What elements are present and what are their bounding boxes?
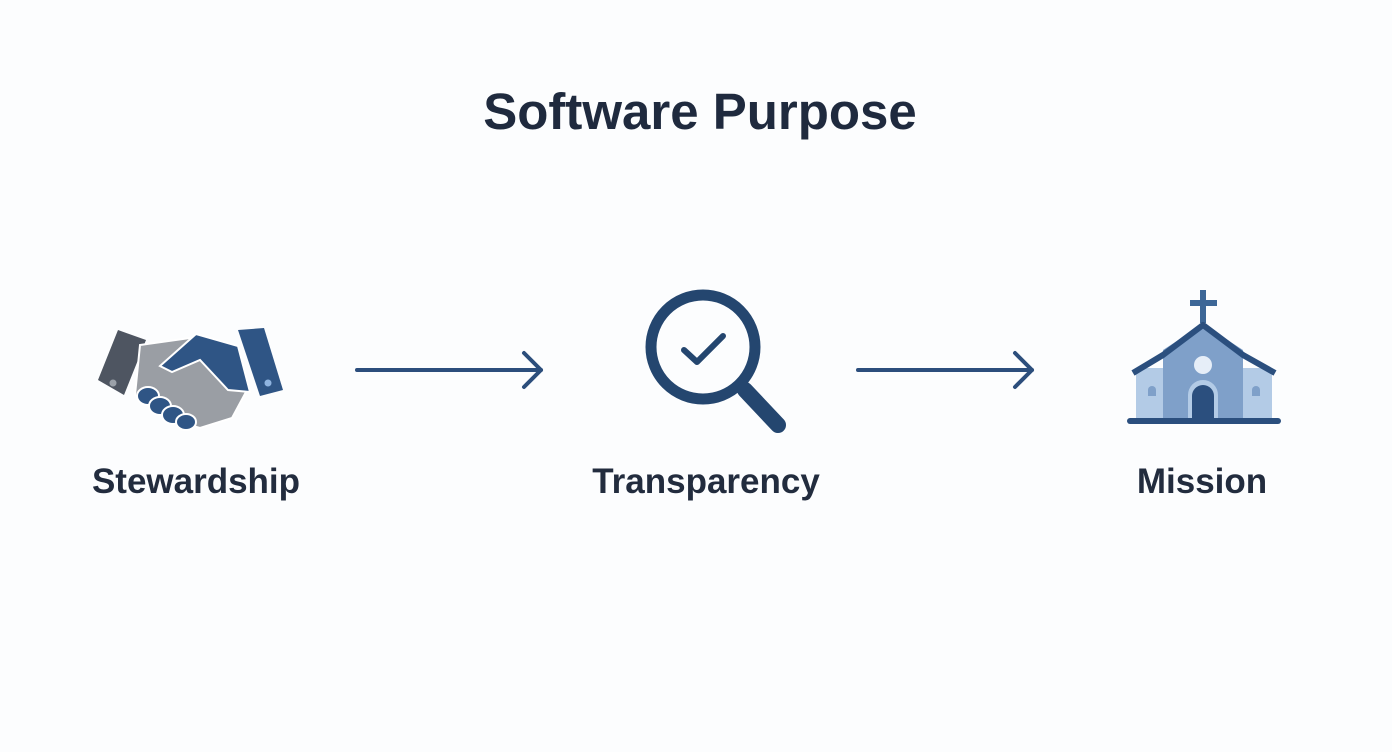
title: Software Purpose xyxy=(483,83,917,140)
arrow 2 xyxy=(858,353,1032,387)
icon: magnifier xyxy=(651,295,778,425)
label: stewardship: Stewardship xyxy=(92,462,300,501)
label: transparency: Transparency xyxy=(592,462,820,501)
icon: church xyxy=(1127,290,1281,424)
arrow 1 xyxy=(357,353,541,387)
icon: handshake xyxy=(98,328,283,430)
label: mission: Mission xyxy=(1137,462,1267,501)
